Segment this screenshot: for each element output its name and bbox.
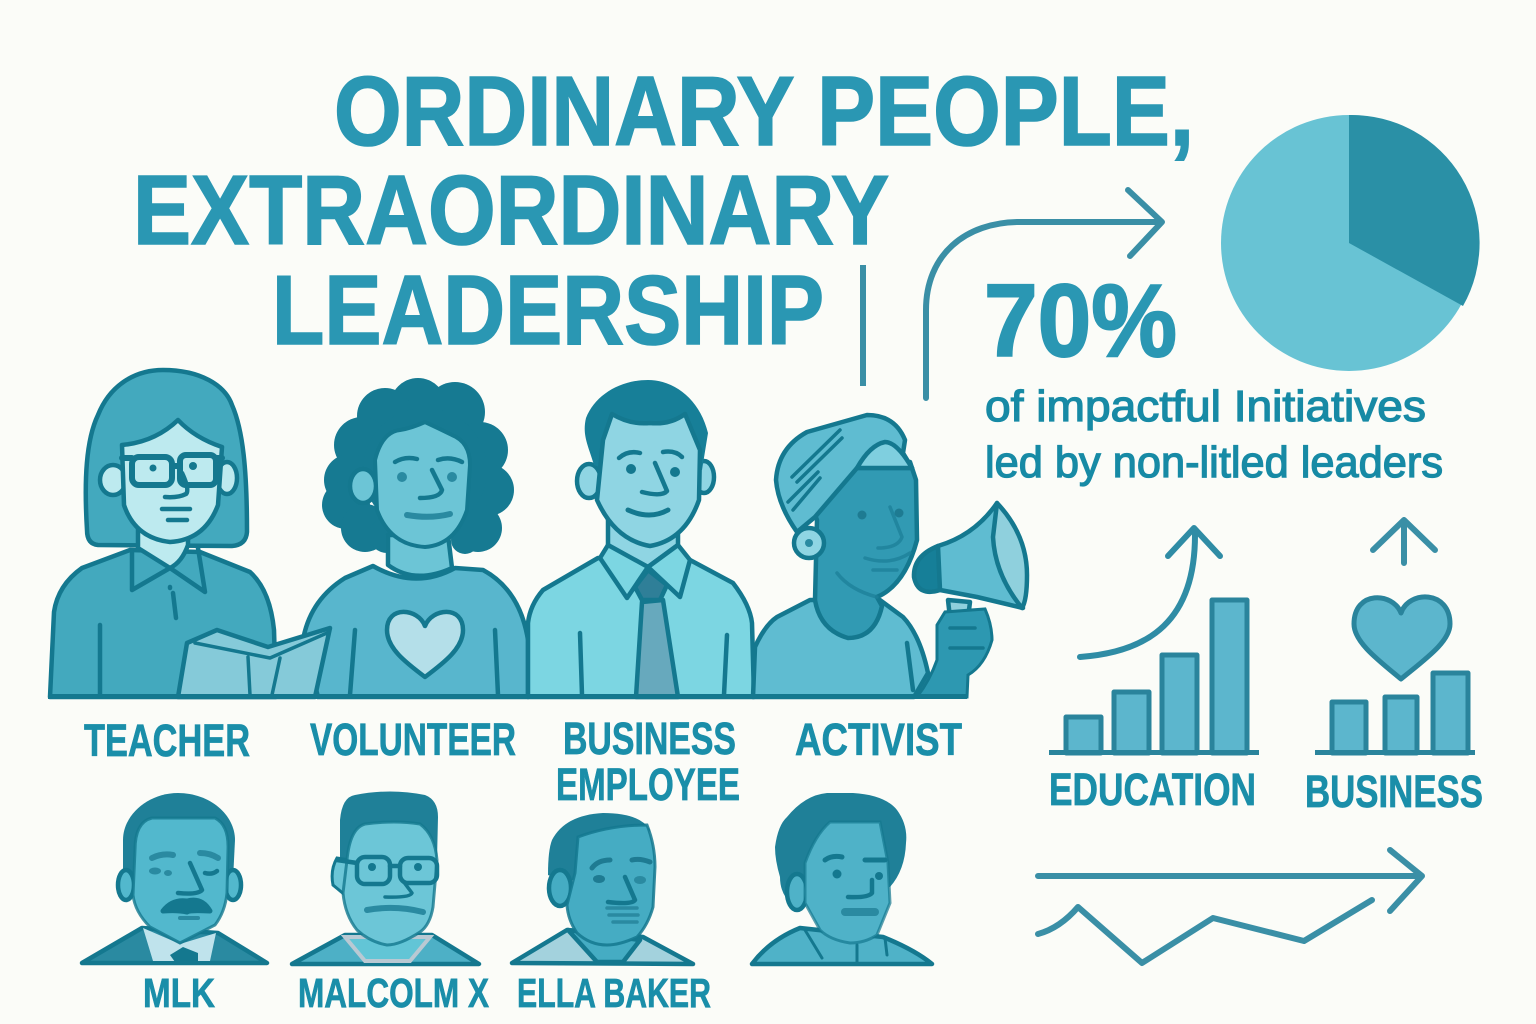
label: volunteer: VOLUNTEER bbox=[310, 714, 516, 765]
teacher glasses bbox=[122, 455, 222, 485]
label: activist: ACTIVIST bbox=[795, 714, 962, 765]
arrow: long horizontal bbox=[1038, 850, 1422, 911]
label: Ella Baker: ELLA BAKER bbox=[517, 970, 711, 1016]
text: statistic description: led by non-litled leaders bbox=[985, 438, 1443, 487]
teacher hair bbox=[86, 370, 247, 546]
teacher body bbox=[50, 550, 276, 697]
ground line bbox=[48, 694, 967, 699]
icon: heart bbox=[1354, 597, 1450, 679]
figure: activist with megaphone bbox=[753, 415, 1027, 697]
arrow: curved arrow toward pie bbox=[926, 190, 1162, 398]
teacher neck bbox=[138, 525, 188, 568]
activist hand and arm bbox=[917, 609, 992, 697]
volunteer ear bbox=[350, 469, 376, 503]
title: EXTRAORDINARY bbox=[133, 155, 889, 265]
text: statistic description: of impactful Initiatives bbox=[985, 382, 1426, 431]
teacher ears bbox=[100, 465, 126, 495]
open book bbox=[178, 628, 330, 697]
chart: business bars bbox=[1315, 673, 1475, 755]
label: MLK: MLK bbox=[143, 970, 215, 1016]
employee hair bbox=[585, 380, 708, 470]
employee body bbox=[528, 558, 754, 697]
portrait: fourth leader bbox=[752, 793, 932, 964]
title: ORDINARY PEOPLE, bbox=[334, 56, 1194, 166]
portrait: Ella Baker bbox=[512, 813, 693, 964]
volunteer face bbox=[375, 422, 470, 547]
activist neck and face bbox=[815, 462, 917, 638]
title: LEADERSHIP bbox=[272, 255, 824, 365]
text: statistic description bbox=[985, 382, 1443, 487]
activist body bbox=[753, 600, 928, 697]
heart icon on shirt bbox=[387, 612, 463, 677]
arrow: education curved up bbox=[1080, 528, 1220, 657]
label: business: BUSINESS bbox=[1305, 766, 1483, 817]
volunteer hair bbox=[322, 378, 514, 554]
portrait: Malcolm X bbox=[292, 792, 479, 964]
figure: volunteer bbox=[303, 378, 528, 697]
volunteer neck bbox=[388, 535, 452, 576]
chart: education bars bbox=[1049, 600, 1259, 755]
turban bbox=[776, 415, 912, 532]
label: teacher: TEACHER bbox=[84, 715, 250, 766]
label: Malcolm X: MALCOLM X bbox=[298, 970, 489, 1016]
pie chart: 70 percent bbox=[1221, 115, 1480, 371]
employee face bbox=[597, 414, 700, 546]
teacher face bbox=[122, 420, 222, 542]
megaphone bbox=[914, 503, 1027, 618]
figure: business employee bbox=[528, 380, 754, 697]
collar and tie bbox=[636, 600, 678, 697]
moustache bbox=[163, 900, 210, 912]
vertical accent line bbox=[860, 265, 866, 386]
portrait: MLK bbox=[82, 793, 267, 963]
label: business employee: BUSINESS bbox=[563, 713, 736, 764]
line: zigzag trend bbox=[1038, 900, 1372, 963]
figure: teacher bbox=[50, 370, 276, 697]
label: business employee bbox=[556, 713, 740, 810]
arrow: business up bbox=[1373, 520, 1435, 563]
employee ears bbox=[577, 464, 601, 498]
volunteer body bbox=[303, 566, 528, 697]
title bbox=[133, 56, 1194, 365]
label: education: EDUCATION bbox=[1049, 764, 1256, 815]
label: business employee: EMPLOYEE bbox=[556, 759, 740, 810]
employee neck bbox=[608, 515, 678, 567]
earring bbox=[794, 528, 824, 558]
statistic: 70%: 70% bbox=[984, 263, 1177, 378]
